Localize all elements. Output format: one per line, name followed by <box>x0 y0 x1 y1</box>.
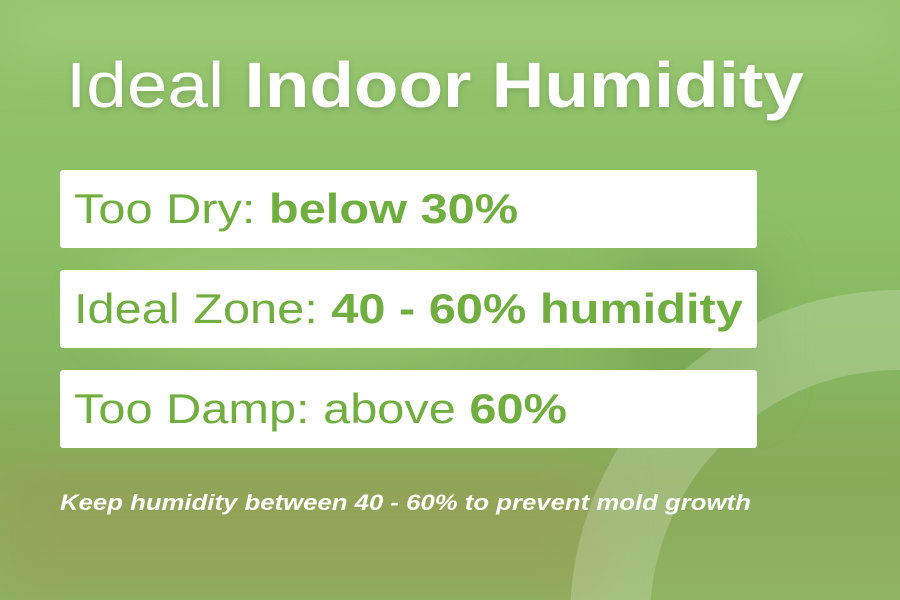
decorative ring <box>610 330 900 600</box>
box: too damp <box>60 370 757 448</box>
title: Ideal Indoor Humidity <box>66 49 804 121</box>
box: ideal zone: Ideal Zone: 40 - 60% humidity <box>74 285 743 332</box>
box: ideal zone <box>60 270 757 348</box>
footnote: Keep humidity between 40 - 60% to prevent mold growth <box>60 490 751 515</box>
box: too dry: Too Dry: below 30% <box>74 185 518 232</box>
box: too dry <box>60 170 757 248</box>
box: too damp: Too Damp: above 60% <box>74 385 567 432</box>
